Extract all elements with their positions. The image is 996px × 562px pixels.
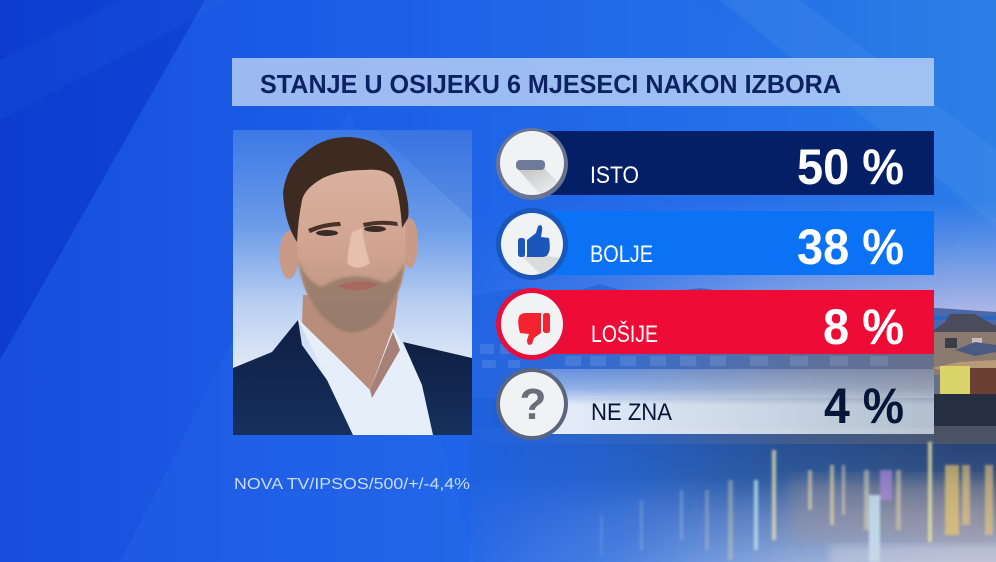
row: bolje [496, 208, 934, 280]
water reflections [600, 442, 996, 562]
row: bolje: 38 % [797, 219, 904, 275]
eyes [308, 221, 398, 236]
building windows [480, 344, 888, 368]
icon: thumbs down [496, 288, 568, 360]
row: isto: 50 % [797, 139, 904, 195]
nose [348, 228, 370, 268]
row: ne zna: 4 % [824, 378, 904, 434]
portrait photo [233, 130, 472, 435]
jacket left [233, 320, 353, 435]
hair [283, 137, 408, 242]
icon: question mark [496, 368, 568, 440]
icon: question mark: ? [520, 380, 546, 429]
beard [298, 258, 404, 332]
ears and neck [280, 218, 418, 390]
row: bolje: BOLJE [590, 241, 653, 268]
title bar [232, 58, 934, 106]
row: losije: 8 % [823, 299, 904, 355]
row: isto: ISTO [590, 162, 639, 189]
icon: minus [496, 128, 568, 200]
city photo backdrop [470, 200, 996, 562]
face [297, 155, 406, 332]
source note: NOVA TV/IPSOS/500/+/-4,4% [234, 476, 470, 493]
mouth [337, 281, 380, 291]
row: isto [496, 128, 934, 200]
icon: thumbs up [496, 208, 568, 280]
row: ne zna: NE ZNA [591, 399, 672, 426]
row: losije: LOŠIJE [591, 320, 658, 348]
title bar: STANJE U OSIJEKU 6 MJESECI NAKON IZBORA [260, 69, 841, 99]
row: ne zna [496, 368, 934, 440]
city buildings [932, 314, 996, 442]
row: losije [496, 288, 934, 360]
jacket right [403, 342, 472, 435]
shirt [297, 318, 433, 435]
